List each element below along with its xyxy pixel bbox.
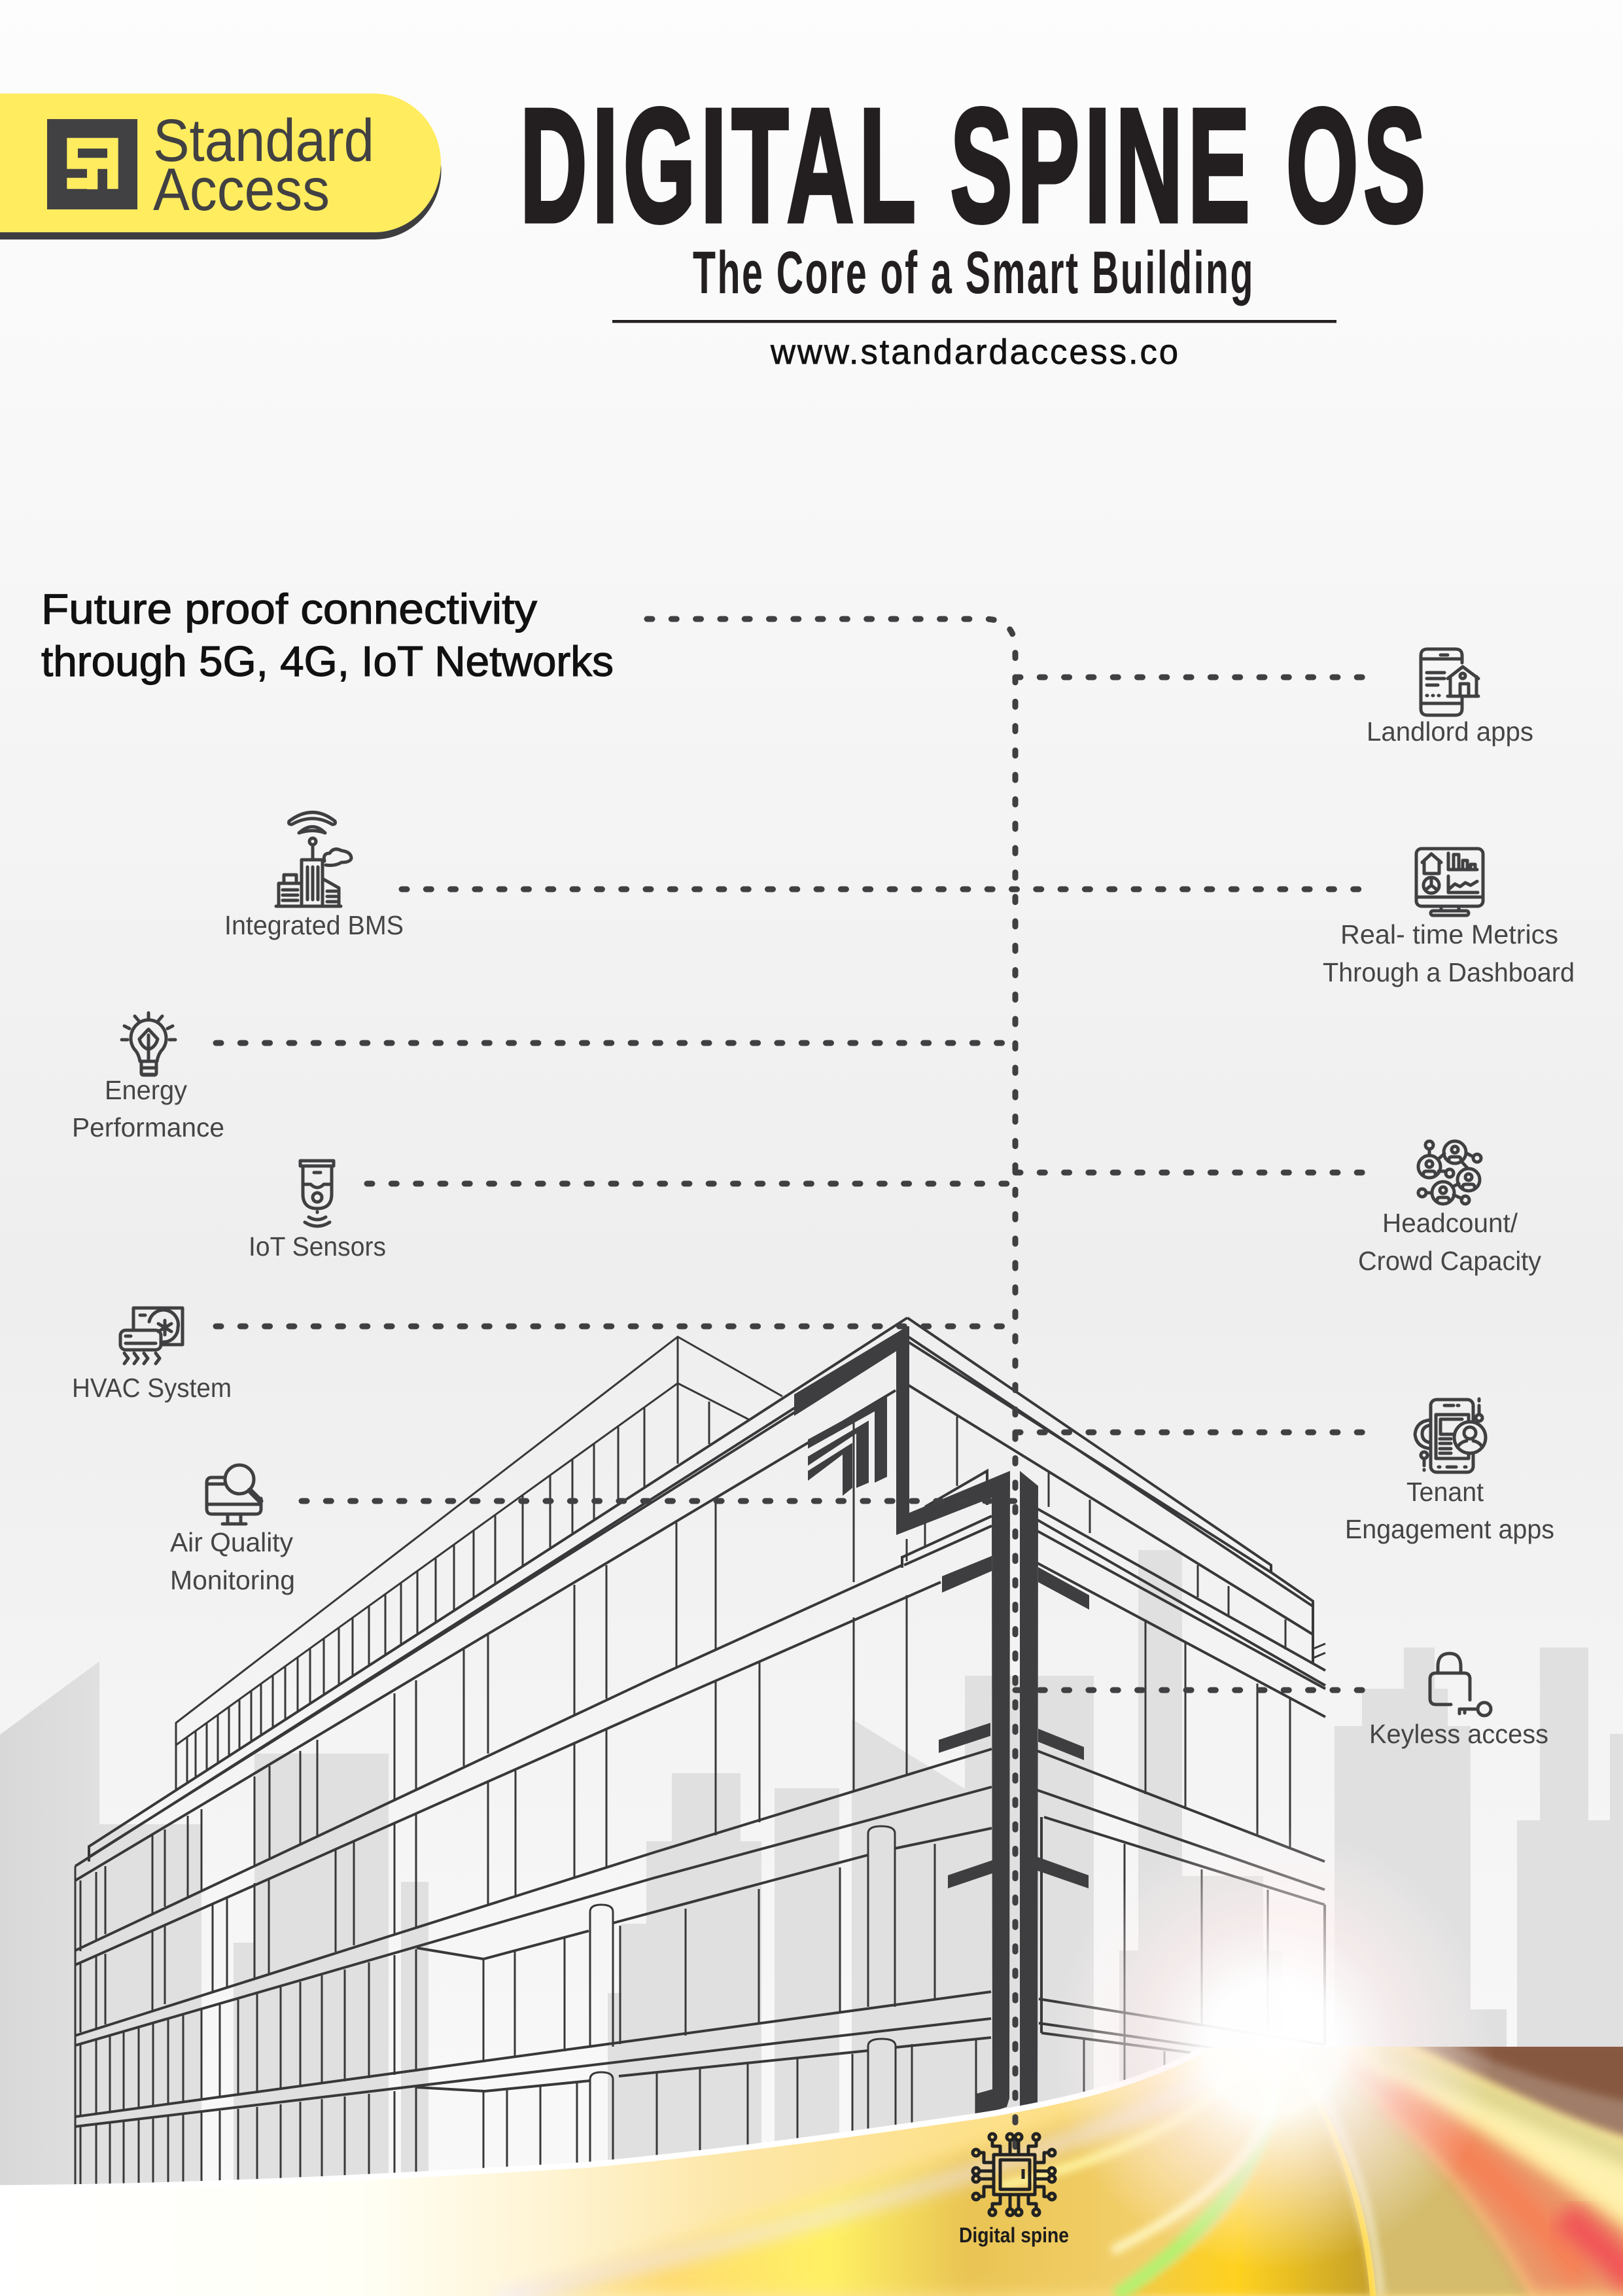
road top edge — [0, 2049, 1204, 2188]
item: digital spine: Digital spine — [959, 2223, 1069, 2247]
item: landlord apps — [1367, 649, 1533, 747]
logo badge — [0, 94, 441, 239]
item: headcount crowd capacity — [1358, 1141, 1541, 1276]
right facade mullions — [907, 1385, 1325, 2098]
right facade floor bands — [907, 1318, 1325, 2053]
icon: sensor camera — [300, 1161, 334, 1226]
item: air quality monitoring — [170, 1465, 295, 1595]
left facade mullions second tier — [80, 1595, 907, 2032]
item: real-time metrics — [1323, 849, 1575, 987]
item: HVAC system — [72, 1308, 232, 1403]
item: energy performance: Performance — [72, 1112, 224, 1142]
item: energy performance: Energy — [105, 1075, 187, 1105]
item: digital spine — [959, 2134, 1069, 2247]
item: real-time metrics: Through a Dashboard — [1323, 957, 1575, 987]
icon: eco light bulb — [122, 1013, 175, 1075]
spine right bar — [1020, 1471, 1038, 2109]
icon: monitor with magnifier — [207, 1465, 261, 1524]
icon: padlock and key — [1430, 1653, 1491, 1716]
item: energy performance — [72, 1013, 224, 1142]
item: real-time metrics: Real- time Metrics — [1340, 919, 1558, 949]
connectivity callout: Future proof connectivity — [41, 585, 538, 633]
left facade mullions bottom tier — [80, 2039, 976, 2189]
icon: phone with house — [1421, 649, 1478, 715]
item: tenant engagement apps — [1345, 1399, 1554, 1544]
item: IoT sensors — [249, 1161, 386, 1262]
spine left bar — [794, 1326, 1010, 2117]
item: air quality monitoring: Air Quality — [170, 1527, 293, 1557]
item: integrated BMS — [224, 813, 404, 940]
icon: air conditioner — [120, 1308, 183, 1364]
icon: dashboard monitor — [1416, 849, 1483, 915]
item: keyless access: Keyless access — [1369, 1719, 1548, 1749]
light glow — [1047, 1819, 1505, 2277]
item: tenant engagement apps: Tenant — [1406, 1477, 1484, 1507]
website url: www.standardaccess.co — [770, 332, 1180, 372]
left facade mullions upper tier — [75, 1422, 925, 2189]
icon: connected people — [1418, 1141, 1481, 1204]
connectivity callout: through 5G, 4G, IoT Networks — [41, 637, 614, 685]
left facade floor bands — [75, 1318, 992, 2127]
logo badge: Standard — [153, 107, 374, 174]
icon: phone with user and gear — [1415, 1399, 1486, 1472]
light streak road — [0, 2041, 1623, 2296]
digital spine structure — [794, 1326, 1089, 2117]
item: air quality monitoring: Monitoring — [170, 1565, 295, 1595]
item: keyless access — [1369, 1653, 1548, 1749]
building line drawing — [75, 1318, 1325, 2189]
building chevron logo — [808, 1396, 887, 1496]
item: HVAC system: HVAC System — [72, 1373, 232, 1403]
city skyline silhouettes — [0, 1550, 1623, 2191]
item: integrated BMS: Integrated BMS — [224, 910, 404, 940]
item: IoT sensors: IoT Sensors — [249, 1231, 386, 1262]
item: headcount crowd capacity: Crowd Capacity — [1358, 1246, 1541, 1276]
penthouse outline — [176, 1337, 782, 1790]
icon: microchip — [973, 2134, 1055, 2216]
header rule — [612, 320, 1336, 323]
icon: smart city tower — [276, 813, 351, 906]
item: headcount crowd capacity: Headcount/ — [1382, 1208, 1518, 1238]
cylindrical columns — [590, 1826, 896, 2189]
spine ribs — [939, 1556, 1089, 1888]
left facade mullions third tier — [80, 1844, 935, 2116]
item: landlord apps: Landlord apps — [1367, 716, 1533, 747]
connectivity callout — [41, 585, 614, 685]
subtitle: The Core of a Smart Building — [693, 239, 1255, 306]
item: tenant engagement apps: Engagement apps — [1345, 1514, 1554, 1544]
connector lines — [216, 619, 1370, 2149]
logo badge: Access — [153, 156, 330, 223]
